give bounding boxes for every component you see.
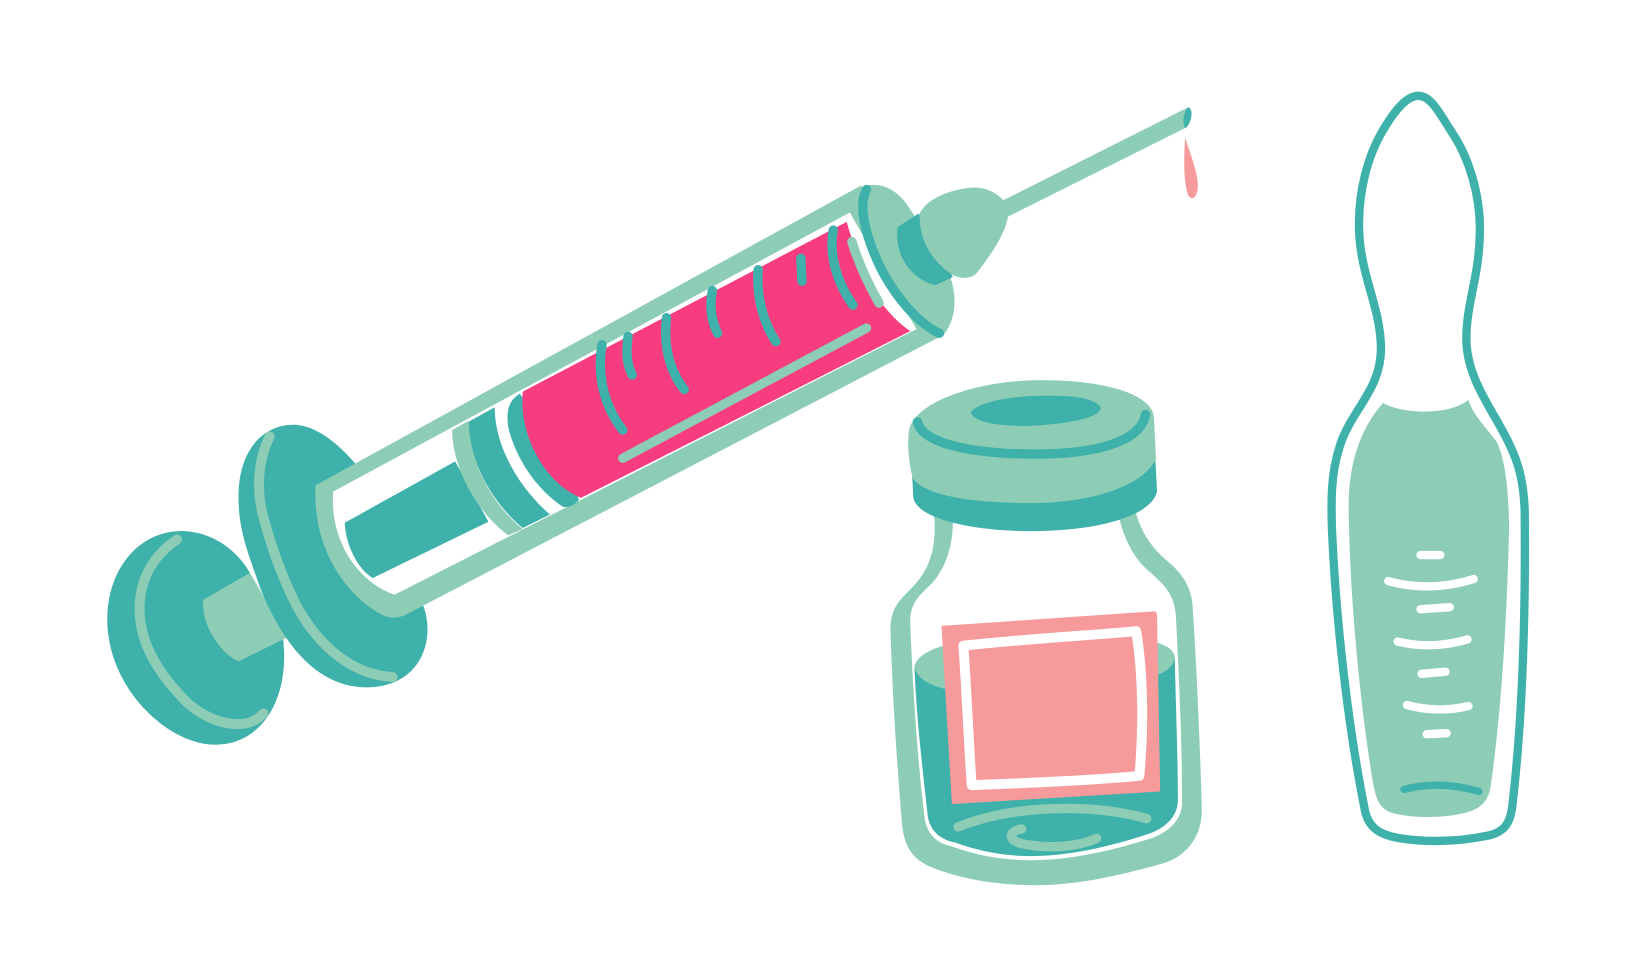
barrel (315, 185, 943, 618)
flange arc (863, 190, 939, 333)
glass reflections (958, 809, 1147, 847)
needle tip (1183, 107, 1192, 128)
plunger rod stem (203, 573, 287, 661)
ampoule outline (1332, 96, 1525, 841)
piston seal (452, 407, 550, 535)
icon: ampoule (1332, 96, 1525, 841)
liquid highlights (623, 242, 879, 458)
front flange (864, 185, 955, 335)
base arc (1404, 785, 1479, 791)
icon: syringe (107, 107, 1198, 745)
plunger back disk (107, 531, 284, 745)
liquid top surface (914, 640, 1175, 690)
label (941, 611, 1160, 804)
plunger front disk (238, 425, 428, 687)
icon: vial (890, 380, 1202, 885)
vial cap (908, 380, 1157, 531)
ampoule liquid (1349, 400, 1509, 817)
pink liquid (522, 222, 910, 498)
drop (1184, 137, 1198, 198)
hub collar (897, 213, 953, 285)
plunger rod (345, 461, 488, 578)
measurement ticks (1388, 555, 1474, 734)
needle hub (920, 187, 1008, 278)
liquid (914, 656, 1178, 856)
vial interior (910, 516, 1182, 860)
plunger tip (508, 394, 579, 507)
graduation marks (600, 230, 853, 430)
needle (1000, 107, 1188, 218)
vial glass (890, 510, 1202, 885)
